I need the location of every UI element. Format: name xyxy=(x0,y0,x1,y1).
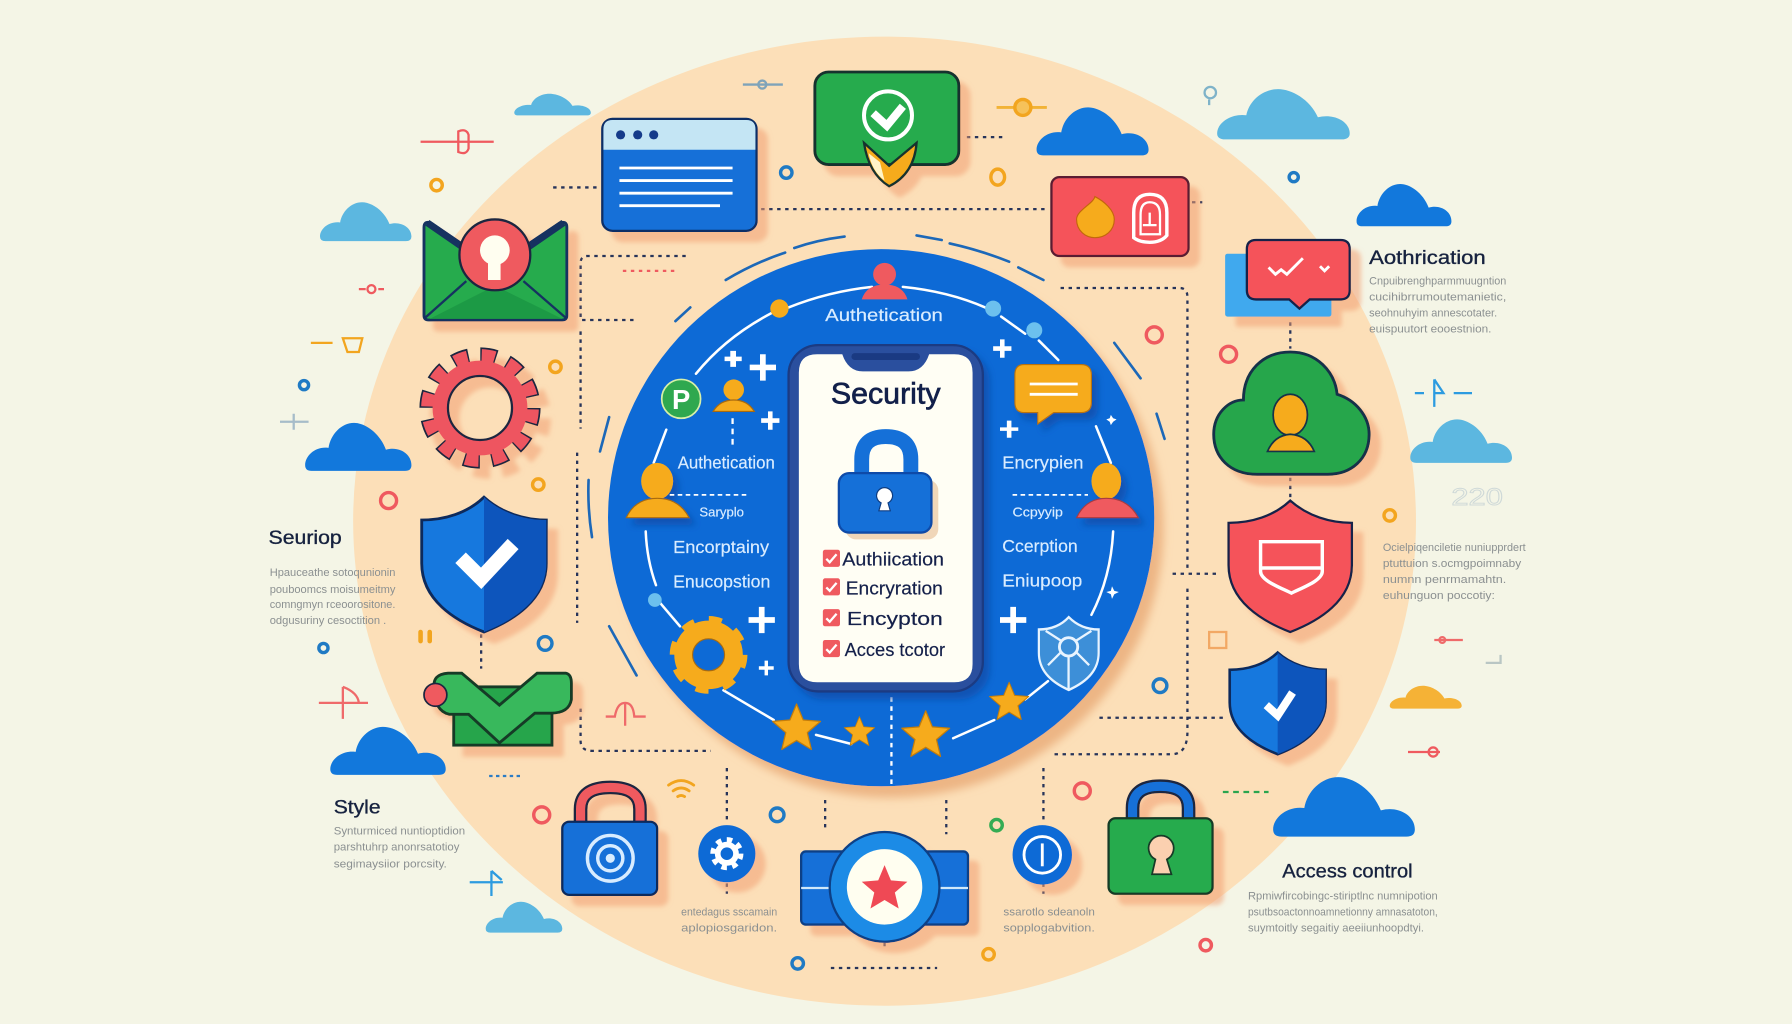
text block: bottom right caption: ssarotlo sdeanoln xyxy=(1003,906,1095,918)
left authentication labels: Authetication xyxy=(678,453,775,473)
text block: Access control: Access control xyxy=(1282,861,1413,883)
inner white orbit ring xyxy=(646,287,1113,786)
right encryption labels xyxy=(1002,453,1088,590)
decorative small glyphs xyxy=(280,81,1501,896)
text block: Seuriop: odgusuriny cesoctition . xyxy=(270,615,386,627)
icon: red person top xyxy=(862,263,907,299)
text block: right description: numnn penrmamahtn. xyxy=(1383,574,1506,586)
icon: chat card xyxy=(1225,240,1350,317)
icon: small blue shield xyxy=(1230,653,1326,754)
right encryption labels: Encrypien xyxy=(1002,453,1083,473)
text block: Seuriop xyxy=(269,527,396,627)
phone xyxy=(789,345,983,691)
text block: Aothrication: seohnuhyim annescotater. xyxy=(1369,308,1497,320)
text block: Aothrication: Aothrication xyxy=(1369,247,1486,269)
text block: bottom right caption xyxy=(1003,906,1095,934)
checklist: Encypton xyxy=(847,608,943,629)
phone screen xyxy=(799,354,973,682)
left authentication labels: Encorptainy xyxy=(673,537,770,557)
text block: Style: Synturmiced nuntioptidion xyxy=(334,825,465,837)
phone heading: Security xyxy=(831,377,941,410)
icon: green envelope with key badge xyxy=(424,219,567,320)
text block: bottom left caption: aplopiosgaridon. xyxy=(681,922,777,934)
text block: Style: segimaysiior porcsity. xyxy=(334,858,447,870)
text block: Style: parshtuhrp anonrsatotioy xyxy=(334,841,460,853)
icon: browser window xyxy=(602,119,757,231)
text block: Aothrication: euispuutort eooestnion. xyxy=(1369,324,1491,336)
right encryption labels: Eniupoop xyxy=(1002,570,1082,590)
text block: Seuriop: comngmyn rceoorositone. xyxy=(270,599,395,611)
icon: blue shield check xyxy=(422,497,546,632)
text block: right description: euhunguon poccotiy: xyxy=(1383,590,1495,602)
decorative clouds xyxy=(305,89,1512,933)
text block: right description xyxy=(1383,542,1526,602)
text block: Style: Style xyxy=(334,797,381,819)
left authentication labels xyxy=(670,453,775,591)
text block: Aothrication: cucihibrrumoutemanietic, xyxy=(1369,292,1506,304)
text block: right description: Ocielpiqenciletie nuniupprdert xyxy=(1383,542,1526,554)
icon: red gear xyxy=(427,355,533,461)
icon: info badge xyxy=(1013,825,1072,885)
central blue disc xyxy=(608,249,1154,786)
icon: blue wheel shield xyxy=(1039,617,1099,690)
right encryption labels: Ccpyyip xyxy=(1013,506,1063,520)
outer dashed arc segments xyxy=(588,235,1165,675)
icon: green padlock xyxy=(1109,786,1213,894)
left authentication labels: Saryplo xyxy=(699,506,744,520)
text block: Style xyxy=(334,797,465,870)
text block: Access control: Rpmiwfircobingc-stiriptlnc numnipotion xyxy=(1248,890,1438,902)
icon: large person left xyxy=(626,463,689,518)
icon: orange chat bubble xyxy=(1015,365,1091,424)
text block: bottom left caption xyxy=(681,906,777,934)
text block: Access control: suymtoitly segaitiy aeeiiunhoopdtyi. xyxy=(1248,922,1424,934)
checklist xyxy=(823,549,945,660)
text block: Access control: psutbsoactonnoamnetionny amnasatoton, xyxy=(1248,906,1438,918)
faint number label: 220 xyxy=(1451,484,1503,511)
plus signs xyxy=(725,339,1119,675)
text block: Access control xyxy=(1248,861,1438,934)
icon: orange target glyph and red fingerprint card xyxy=(1051,177,1189,256)
icon: gold stars xyxy=(773,682,1029,756)
label: top authentication: Authetication xyxy=(825,305,943,325)
icon: padlock xyxy=(839,437,938,539)
wifi glyph xyxy=(669,781,694,797)
icon: green cloud user xyxy=(1214,352,1369,474)
icon: gear badge xyxy=(698,825,755,882)
dotted connector network xyxy=(481,137,1290,968)
icon: green P badge: P xyxy=(672,384,690,415)
large peach backdrop ellipse xyxy=(353,37,1416,1006)
text block: Aothrication xyxy=(1369,247,1506,336)
text block: Seuriop: pouboomcs moisumeitmy xyxy=(270,584,396,596)
icon: red shield xyxy=(1229,501,1352,632)
checklist: Authiication xyxy=(842,549,944,570)
ring node dots xyxy=(648,299,1042,607)
checklist: Acces tcotor xyxy=(845,639,945,660)
icon: open green envelope xyxy=(424,673,571,745)
icon: blue padlock with target xyxy=(562,787,657,895)
text block: bottom right caption: sopplogabvition. xyxy=(1003,922,1095,934)
icon: orange gear xyxy=(674,621,743,689)
phone speaker xyxy=(851,353,920,360)
icon: small orange person xyxy=(713,379,754,411)
left authentication labels: Enucopstion xyxy=(673,571,770,591)
decorative rings xyxy=(299,167,1395,969)
text block: Seuriop: Seuriop xyxy=(269,527,342,549)
text block: right description: ptuttuion s.ocmgpoimnaby xyxy=(1383,558,1521,570)
icon: green check badge xyxy=(815,72,959,186)
text block: Aothrication: Cnpuibrenghparmmuugntion xyxy=(1369,276,1506,288)
icon: star camera badge xyxy=(801,832,968,942)
right encryption labels: Ccerption xyxy=(1002,536,1078,556)
icon: green P badge xyxy=(662,379,701,418)
checklist: Encryration xyxy=(846,577,943,598)
icon: large person right xyxy=(1077,463,1138,518)
text block: Seuriop: Hpauceathe sotoqunionin xyxy=(270,567,395,579)
text block: bottom left caption: entedagus sscamain xyxy=(681,906,777,918)
